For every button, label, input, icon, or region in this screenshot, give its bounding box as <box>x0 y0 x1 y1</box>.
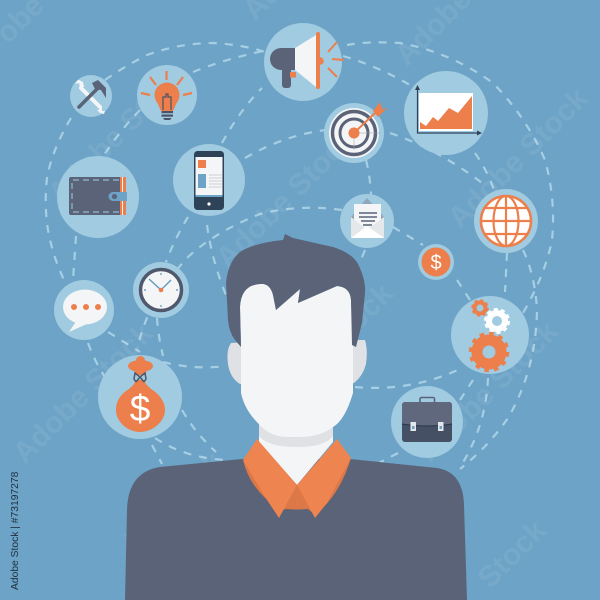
icon: wallet <box>57 156 139 238</box>
watermark: Adobe Stock <box>210 122 363 275</box>
icon: money bag <box>98 355 182 439</box>
torso <box>125 459 467 600</box>
icon: dollar coin <box>418 244 454 280</box>
dashed connection network <box>46 42 553 469</box>
ears <box>227 340 367 384</box>
collar shadow <box>243 458 351 515</box>
icon: tools <box>70 75 112 117</box>
icon: dollar coin: $ <box>430 252 442 274</box>
hair <box>226 234 365 347</box>
face <box>240 284 353 437</box>
watermark: Stock <box>472 514 553 595</box>
watermark: Adobe Stock <box>412 315 565 468</box>
icon: target with arrow <box>324 102 387 163</box>
watermark: Stock <box>269 517 350 598</box>
icon: clock <box>133 262 189 318</box>
watermark: be Stock <box>119 445 231 557</box>
icon: megaphone <box>264 23 344 101</box>
icon: envelope <box>340 194 394 248</box>
icon: gears <box>451 296 529 374</box>
neck <box>259 420 333 485</box>
icon: briefcase <box>391 386 463 458</box>
watermark: Adobe Stock <box>7 317 160 470</box>
neck shadow <box>259 424 333 447</box>
watermark: Adobe Stock <box>442 82 595 235</box>
watermark: Adobe Stock <box>247 277 400 430</box>
stock credit: Adobe Stock | #73197278 <box>10 471 21 590</box>
icon: speech bubble <box>54 280 114 340</box>
icon: globe <box>474 189 538 253</box>
icon: light bulb <box>137 65 197 125</box>
icon: line chart <box>404 71 488 155</box>
watermark: Adobe Stock <box>42 57 195 210</box>
icon: smartphone <box>173 144 245 216</box>
collar <box>243 439 351 518</box>
person figure <box>125 234 467 600</box>
icon: money bag: $ <box>130 388 150 429</box>
